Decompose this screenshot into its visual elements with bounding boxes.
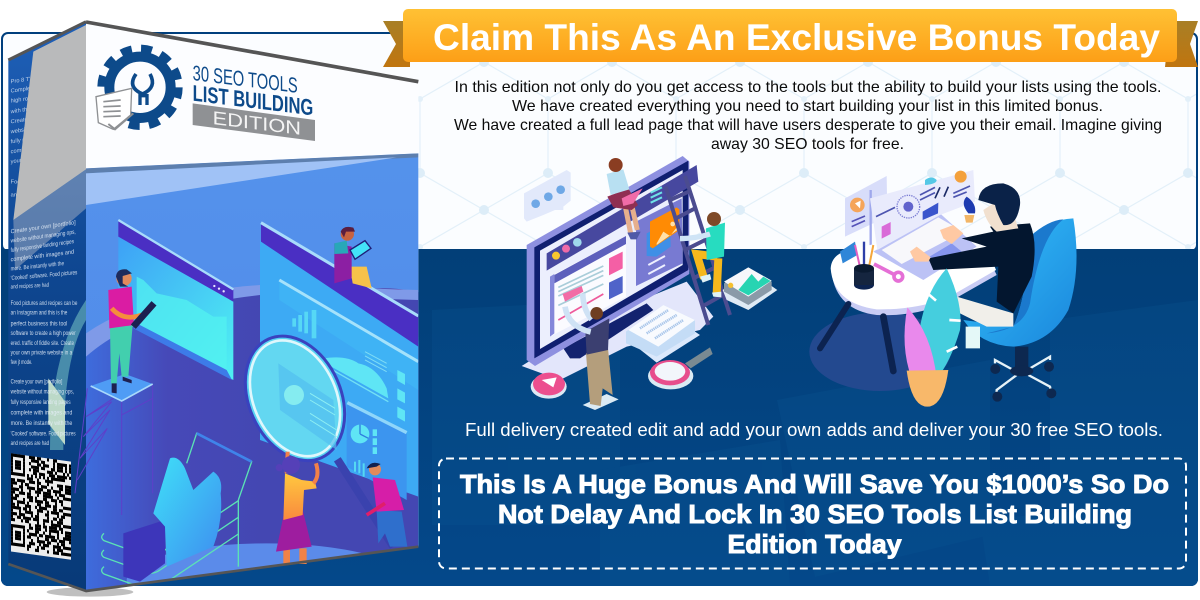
logo edition band: EDITION [213, 107, 301, 139]
box side text, lower: more. Be instantly with the [11, 421, 73, 427]
delivery text: Full delivery created edit and add your own adds and deliver your 30 free SEO tools. [465, 420, 1163, 440]
ladder [666, 176, 730, 325]
icon: orange image tile [650, 207, 679, 248]
box side text, lower: more. Be instantly with the [11, 261, 64, 273]
box side text, lower: Create your own [portfolio] [11, 220, 76, 235]
box side text, lower: fully responsive landing pages [11, 400, 71, 406]
icon: gear with wrench [101, 49, 179, 126]
monitor stand [563, 303, 653, 358]
box side text, lower: 'Cooked' software. Food pictures [11, 270, 77, 282]
desk [820, 227, 997, 371]
screen panel B [260, 223, 418, 500]
logo text: 30 SEO TOOLS: 30 SEO TOOLS [193, 61, 298, 98]
box side text, lower [10, 220, 78, 447]
box side text, top: an [11, 193, 17, 199]
box shadow [47, 587, 133, 597]
light band around floor [86, 285, 418, 356]
floating interface screen [845, 176, 887, 250]
illustration: developer at a desk [809, 170, 1077, 407]
small plant on desk [964, 197, 975, 223]
dashed callout: Edition Today [728, 529, 902, 559]
pale floor disc [126, 543, 361, 584]
monitor shadow base [522, 282, 713, 380]
logo on the box [96, 49, 315, 141]
box side text, lower: and recipes are had [11, 283, 49, 291]
box side text, top [10, 75, 38, 199]
plant in pot [905, 268, 961, 407]
person: man at screen [563, 286, 619, 410]
icon: play button [531, 373, 567, 399]
box side text, lower: software to create a high power [11, 331, 76, 337]
intro text block: In this edition not only do you get access to the tools but the ability to build your lists using the tools. [454, 79, 1162, 96]
box side text, lower: 'Cooked' software. Food pictures [11, 431, 76, 437]
box side text, lower: complete with images and [11, 411, 72, 417]
icon: large magnifying glass [227, 320, 393, 547]
QR code [11, 453, 71, 560]
icon: chat bubble [524, 170, 571, 222]
icon: pink wrench [874, 264, 903, 281]
intro text block: away 30 SEO tools for free. [711, 136, 904, 153]
reflection on left face [13, 25, 86, 220]
icon: document with check [96, 88, 133, 129]
logo text: LIST BUILDING: LIST BUILDING [193, 80, 313, 120]
box side text, top: your [11, 158, 22, 165]
dashed callout: Not Delay And Lock In 30 SEO Tools List Building [498, 499, 1132, 529]
box side text, top: fully re [11, 137, 27, 145]
screen panel A [118, 220, 233, 380]
box side text, lower: few jt mode. [11, 360, 33, 366]
box side text, lower: ered. traffic of fiddle site. Create [11, 341, 74, 347]
box side text, top: Create a [11, 116, 33, 125]
intro text block: We have created a full lead page that will have users desperate to give you their email. Imagine giving [454, 117, 1162, 134]
box side text, lower: your own private website in a [11, 350, 73, 356]
box side text, top: high roto [11, 96, 33, 105]
box side text, top: Complete [11, 85, 35, 95]
box left face [8, 22, 86, 590]
box side text, lower: website without managing ops, [10, 230, 76, 245]
box side text, top: with the [10, 107, 30, 115]
desk shadow [809, 312, 951, 391]
box side text, lower: perfect business this tool [11, 321, 67, 327]
box side text, lower: fully responsive landing recipes [11, 239, 74, 254]
person: sitting with tablet [334, 227, 372, 288]
box side text, top: website [10, 127, 30, 135]
floor [86, 295, 418, 590]
light reflection [86, 157, 397, 205]
dashed callout: This Is A Huge Bonus And Will Save You $1000’s So Do [460, 469, 1169, 499]
person: man pushing handle [367, 463, 407, 547]
icon: pen cup [840, 242, 874, 290]
box side text, top: Food [11, 179, 24, 185]
intro text block: We have created everything you need to start building your list in this limited bonus. [512, 98, 1103, 115]
laptop [870, 170, 977, 280]
illustration: team building a web page on a monitor [522, 156, 777, 410]
monitor [527, 156, 698, 366]
chair [963, 218, 1077, 402]
platform with person [75, 269, 154, 515]
intro text block [454, 79, 1162, 153]
title: Claim This As An Exclusive Bonus Today [433, 17, 1160, 58]
box front face [74, 32, 418, 590]
person: developer [910, 183, 1035, 348]
stack of image cards [723, 267, 777, 310]
band under white [86, 153, 418, 173]
ribbon banner [383, 9, 1198, 67]
box side text, lower: an Instagram and this is the [11, 310, 68, 316]
thumbs up in a cart [102, 433, 252, 590]
box side text, top: Pro 8 T'SG [11, 75, 38, 85]
box side text, lower: Food pictures and recipes can be [11, 301, 78, 307]
dashed callout [439, 458, 1186, 568]
box side text, lower: complete with images and [11, 250, 74, 263]
box side text, lower: Create your own [portfolio] [11, 379, 63, 385]
person: woman with laptop [607, 158, 643, 239]
product box [8, 21, 453, 600]
stack of paper [626, 305, 700, 363]
box side text, lower: website without managing ops, [10, 389, 74, 395]
person: man on ladder [680, 212, 725, 297]
back arc behind panel [375, 288, 418, 341]
person: woman holding magnifier [276, 452, 317, 564]
box side text, top: comp [11, 147, 25, 155]
box edges [8, 22, 418, 591]
box side text, lower: and recipes are had [11, 441, 49, 447]
logo edition band [193, 103, 315, 141]
icon: magnifying glass [648, 347, 713, 389]
lower reflection on left face [13, 169, 86, 270]
